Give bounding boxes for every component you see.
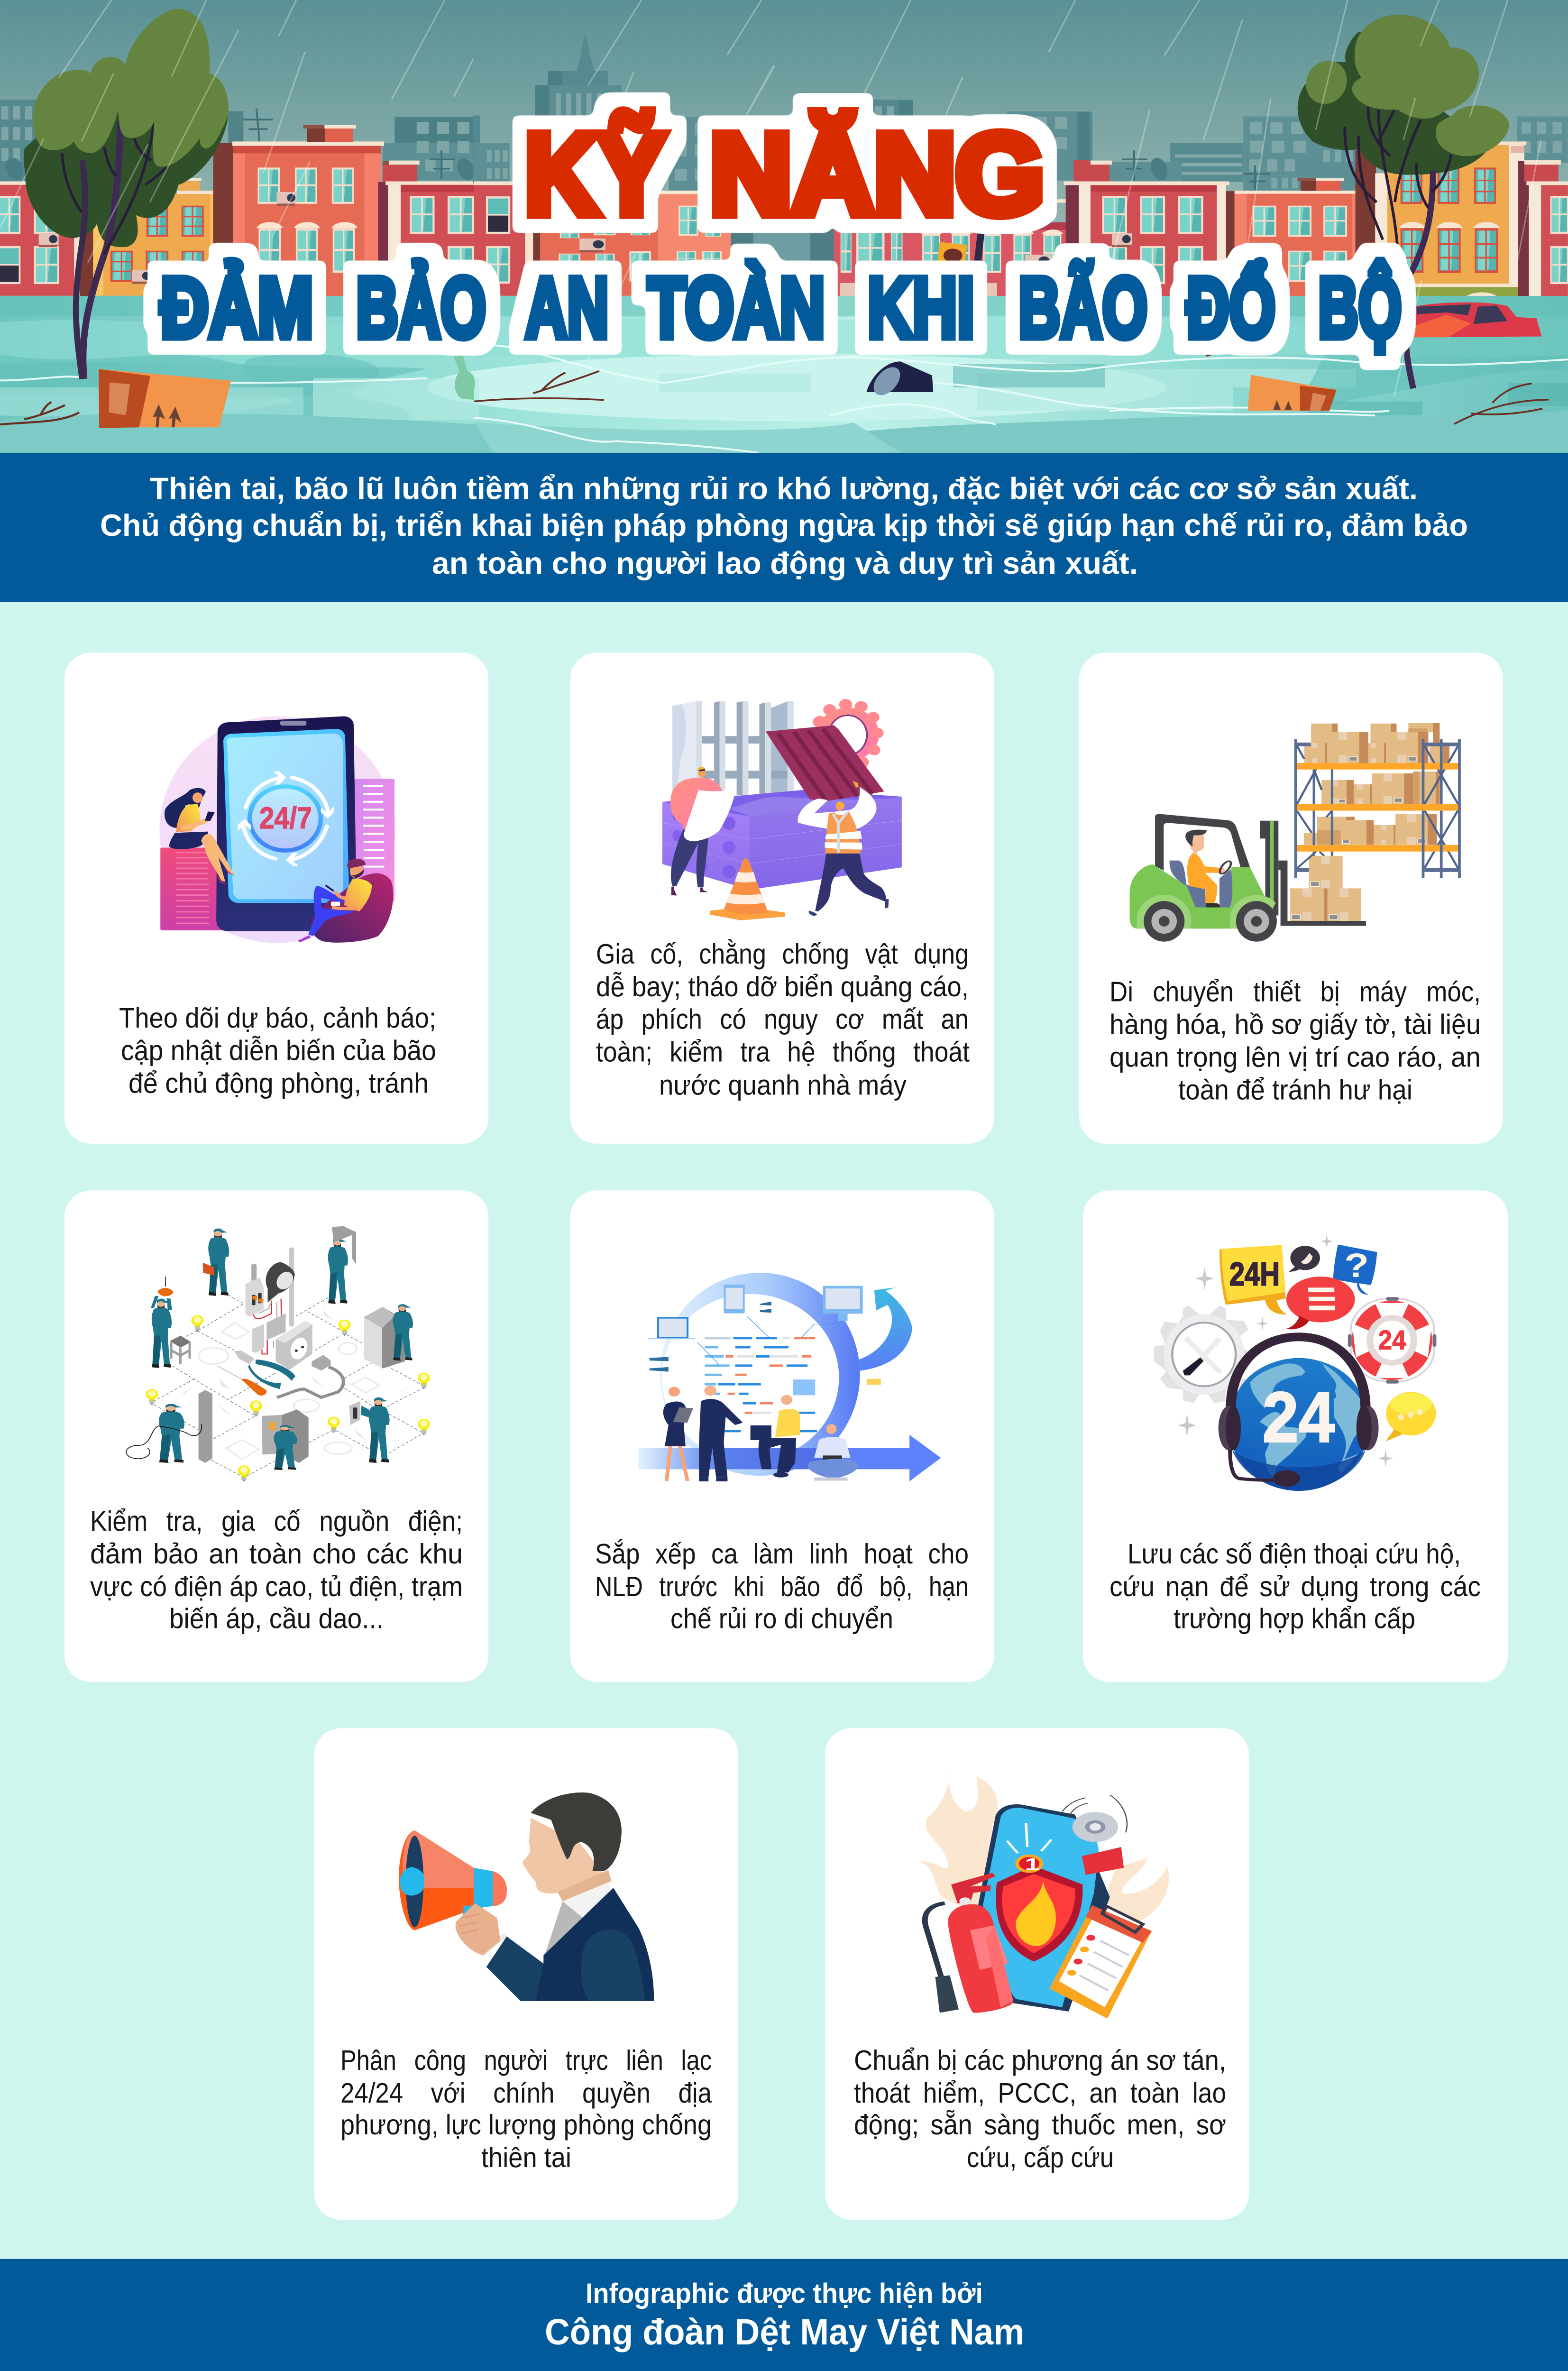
woman on block	[165, 788, 236, 886]
main title: NĂNG	[710, 111, 1044, 238]
pole box	[199, 1390, 212, 1463]
globe	[1229, 1358, 1369, 1491]
man in suit	[456, 1792, 654, 2001]
life ring	[1348, 1297, 1436, 1384]
icon: forklift and warehouse racks	[1130, 723, 1461, 942]
panel: card 6 hotline numbers	[1083, 1190, 1508, 1682]
traffic light	[937, 225, 982, 367]
card 8 text: thoát hiểm, PCCC, an toàn lao	[854, 2077, 1226, 2109]
bubble question	[1333, 1245, 1377, 1295]
man on bean bag	[297, 859, 393, 943]
cabinet right	[364, 1307, 405, 1369]
code lines	[697, 1316, 836, 1432]
panel: card 5 flexible shifts	[570, 1190, 994, 1682]
card 2 text	[596, 938, 970, 1101]
floating box right	[1247, 375, 1337, 411]
card 5 text: NLĐ trước khi bão đổ bộ, hạn	[595, 1571, 969, 1602]
card 7 text: Phân công người trực liên lạc	[340, 2044, 712, 2076]
phone	[977, 1804, 1110, 2012]
card 1 text	[119, 1002, 436, 1099]
icon: isometric electricians	[126, 1226, 430, 1482]
panel: card 2 reinforcing objects	[570, 652, 994, 1144]
card 3 text: hàng hóa, hồ sơ giấy tờ, tài liệu	[1110, 1009, 1481, 1040]
main title	[160, 111, 1402, 355]
shield	[996, 1866, 1082, 1961]
card 5 text	[595, 1538, 969, 1635]
fire extinguisher	[925, 1873, 1013, 2013]
bottle	[454, 355, 475, 400]
card 8 text	[854, 2044, 1226, 2173]
card 2 text: toàn; kiểm tra hệ thống thoát	[596, 1036, 970, 1068]
badge number 1	[1015, 1855, 1043, 1875]
bubble 24H	[1220, 1245, 1287, 1314]
intro band	[0, 453, 1568, 602]
main title: KHI	[868, 260, 974, 355]
badge number 1: 1	[1025, 1855, 1040, 1875]
traffic cone	[710, 858, 785, 920]
life ring: 24	[1378, 1325, 1406, 1355]
flood water	[0, 296, 1568, 453]
footer band	[0, 2259, 1568, 2371]
flames	[919, 1772, 998, 1918]
person sitting cross legged	[808, 1424, 858, 1481]
left tree	[24, 9, 229, 379]
main title: ĐẢM	[160, 260, 313, 355]
card 1 text: để chủ động phòng, tránh	[128, 1067, 429, 1099]
stool	[170, 1335, 191, 1364]
card 5 text: Sắp xếp ca làm linh hoạt cho	[595, 1538, 969, 1570]
man yellow shirt with laptop	[751, 1395, 800, 1478]
card 7 text: thiên tai	[481, 2141, 571, 2173]
breakers and meter	[246, 1247, 343, 1397]
card 4 text: vực có điện áp cao, tủ điện, trạm	[90, 1571, 463, 1602]
rain	[0, 0, 1541, 397]
red car	[1413, 302, 1541, 337]
bubble yellow	[1385, 1392, 1436, 1442]
worker carrying sheet	[798, 781, 889, 916]
floating objects centre	[474, 361, 933, 401]
buildings: right section	[1089, 113, 1568, 299]
card 3 text: quan trọng lên vị trí cao ráo, an	[1110, 1041, 1481, 1073]
panel: card 7 liaison on duty	[314, 1728, 738, 2220]
icon: fire safety phone, extinguisher, checklist	[919, 1772, 1169, 2019]
globe number 24: 24	[1262, 1378, 1335, 1457]
cabinet bottom	[262, 1409, 309, 1463]
main title: ĐỔ	[1186, 260, 1275, 355]
buildings: centre section	[473, 33, 1091, 367]
alarm bell	[1062, 1795, 1127, 1875]
light bulbs	[146, 1315, 430, 1482]
intro text: Thiên tai, bão lũ luôn tiềm ẩn những rủi ro khó lường, đặc biệt với các cơ sở sản xuất.	[150, 471, 1418, 505]
card 2 text: áp phích có nguy cơ mất an	[596, 1003, 969, 1035]
card 5 text: chế rủi ro di chuyển	[670, 1603, 893, 1635]
card 7 text	[340, 2044, 712, 2173]
footer credit: Infographic được thực hiện bởi	[586, 2278, 983, 2309]
buildings: left section	[0, 100, 477, 296]
icon: 24h globe with headset and speech bubbles	[1154, 1234, 1436, 1491]
bubble red	[1286, 1277, 1355, 1329]
card 8 text: Chuẩn bị các phương án sơ tán,	[854, 2044, 1226, 2076]
icon: workers reinforcing roofing sheet	[662, 699, 902, 920]
bubble 24H: 24H	[1229, 1256, 1280, 1293]
warehouse rack with boxes	[1290, 723, 1461, 921]
card 3 text	[1110, 976, 1481, 1105]
sky	[0, 0, 1568, 336]
card 6 text: cứu nạn để sử dụng trong các	[1110, 1571, 1481, 1602]
icon: team and workflow cycle	[638, 1273, 941, 1481]
card 8 text: động; sẵn sàng thuốc men, sơ	[854, 2109, 1226, 2141]
branch centre	[474, 371, 604, 401]
main title: KỸ	[525, 111, 665, 238]
card 2 text: dễ bay; tháo dỡ biển quảng cáo,	[596, 971, 969, 1002]
icon: phone 24/7 with two people	[159, 717, 395, 943]
card 4 text: biến áp, cầu dao...	[169, 1603, 384, 1635]
main title: BẢO	[356, 260, 486, 355]
card 6 text: Lưu các số điện thoại cứu hộ,	[1128, 1538, 1461, 1570]
gear with tools	[1154, 1305, 1255, 1403]
worker figures	[126, 1226, 413, 1470]
curved arrow	[857, 1287, 912, 1371]
card 6 text	[1110, 1538, 1481, 1635]
footer organisation: Công đoàn Dệt May Việt Nam	[545, 2312, 1024, 2353]
switch panel	[349, 1401, 360, 1425]
megaphone	[399, 1830, 507, 1937]
card 4 text: đảm bảo an toàn cho các khu	[90, 1538, 463, 1570]
intro text	[100, 471, 1468, 580]
card 4 text: Kiểm tra, gia cố nguồn điện;	[90, 1505, 463, 1537]
branch left	[0, 402, 79, 424]
card 1 text: Theo dõi dự báo, cảnh báo;	[119, 1002, 436, 1034]
woman with tablet	[663, 1387, 693, 1481]
pliers and screwdriver	[218, 1351, 295, 1396]
intro text: Chủ động chuẩn bị, triển khai biện pháp phòng ngừa kịp thời sẽ giúp hạn chế rủi ro, đảm bảo	[100, 508, 1468, 542]
panel: card 8 evacuation plans	[825, 1728, 1249, 2220]
alert rays	[1007, 1823, 1052, 1853]
cardboard box left	[99, 369, 231, 428]
card 6 text: trường hợp khẩn cấp	[1174, 1603, 1415, 1635]
card 7 text: phương, lực lượng phòng chống	[340, 2109, 712, 2141]
screens	[648, 1285, 881, 1395]
24/7 label: 24/7	[259, 801, 312, 835]
card 7 text: 24/24 với chính quyền địa	[340, 2077, 712, 2109]
panel: card 3 moving equipment	[1079, 652, 1503, 1144]
corrugated metal sheet	[766, 725, 884, 801]
card 3 text: toàn để tránh hư hại	[1178, 1074, 1412, 1105]
headset	[1219, 1337, 1379, 1487]
bubble phone	[1289, 1246, 1320, 1272]
clipboard	[1049, 1905, 1152, 2019]
worker with blueprint	[670, 767, 736, 896]
man standing	[699, 1386, 743, 1481]
header illustration: flooded city in the rain	[0, 0, 1568, 453]
card 8 text: cứu, cấp cứu	[967, 2141, 1114, 2173]
main title: AN	[525, 260, 609, 355]
floating objects left	[0, 355, 475, 428]
card 1 text: cập nhật diễn biến của bão	[121, 1035, 436, 1066]
main title: TOÀN	[648, 260, 825, 355]
intro text: an toàn cho người lao động và duy trì sản xuất.	[432, 546, 1138, 580]
purple concrete blocks	[662, 790, 902, 888]
pink gear	[813, 699, 884, 768]
card 2 text: nước quanh nhà máy	[659, 1069, 907, 1101]
card 3 text: Di chuyển thiết bị máy móc,	[1110, 976, 1481, 1008]
right tree	[1206, 14, 1549, 424]
main title: BỘ	[1318, 260, 1402, 355]
panel: card 4 electrical safety	[64, 1190, 488, 1682]
forklift	[1130, 814, 1366, 942]
card 2 text: Gia cố, chằng chống vật dụng	[596, 938, 969, 970]
branches right	[1206, 344, 1549, 424]
panel: card 1 forecast monitoring	[64, 652, 488, 1144]
tire	[866, 361, 933, 398]
big blue arrow	[843, 1435, 941, 1481]
bubble question: ?	[1344, 1246, 1369, 1285]
icon: man with megaphone	[399, 1792, 654, 2001]
card 4 text	[90, 1505, 463, 1635]
main title: BÃO	[1018, 260, 1147, 355]
